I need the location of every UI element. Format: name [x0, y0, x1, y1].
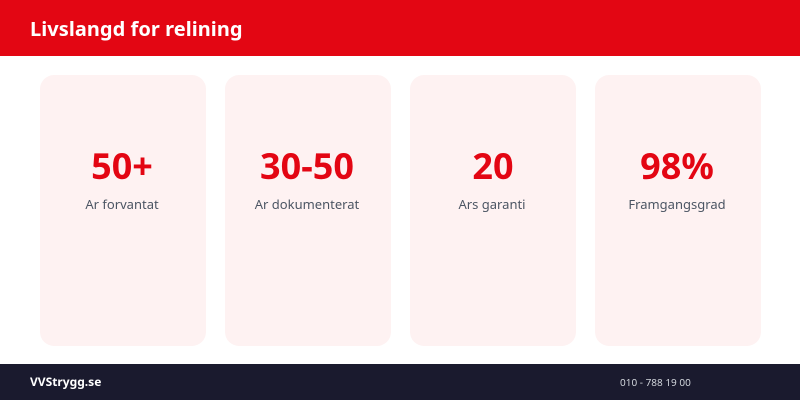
stat label: Framgangsgrad: Framgangsgrad [628, 195, 726, 213]
panel: 50+ years expected [40, 75, 206, 346]
stat value: 50+: 50+ [91, 141, 153, 190]
stat label: Ar dokumenterat: Ar dokumenterat [255, 195, 359, 213]
stat label: Ars garanti: Ars garanti [458, 195, 526, 213]
panel: 98% success rate [595, 75, 761, 346]
panel: 20 years warranty [410, 75, 576, 346]
stat value: 20: 20 [472, 141, 514, 190]
footer bar [0, 364, 800, 400]
stat label: Ar forvantat: Ar forvantat [85, 195, 159, 213]
stat value: 98%: 98% [640, 141, 714, 190]
title: Livslangd for relining [30, 15, 243, 42]
phone number: 010 - 788 19 00 [620, 375, 691, 389]
panel: 30-50 years documented [225, 75, 391, 346]
header bar [0, 0, 800, 56]
brand name: VVStrygg.se [30, 373, 101, 390]
stat value: 30-50: 30-50 [260, 141, 354, 190]
